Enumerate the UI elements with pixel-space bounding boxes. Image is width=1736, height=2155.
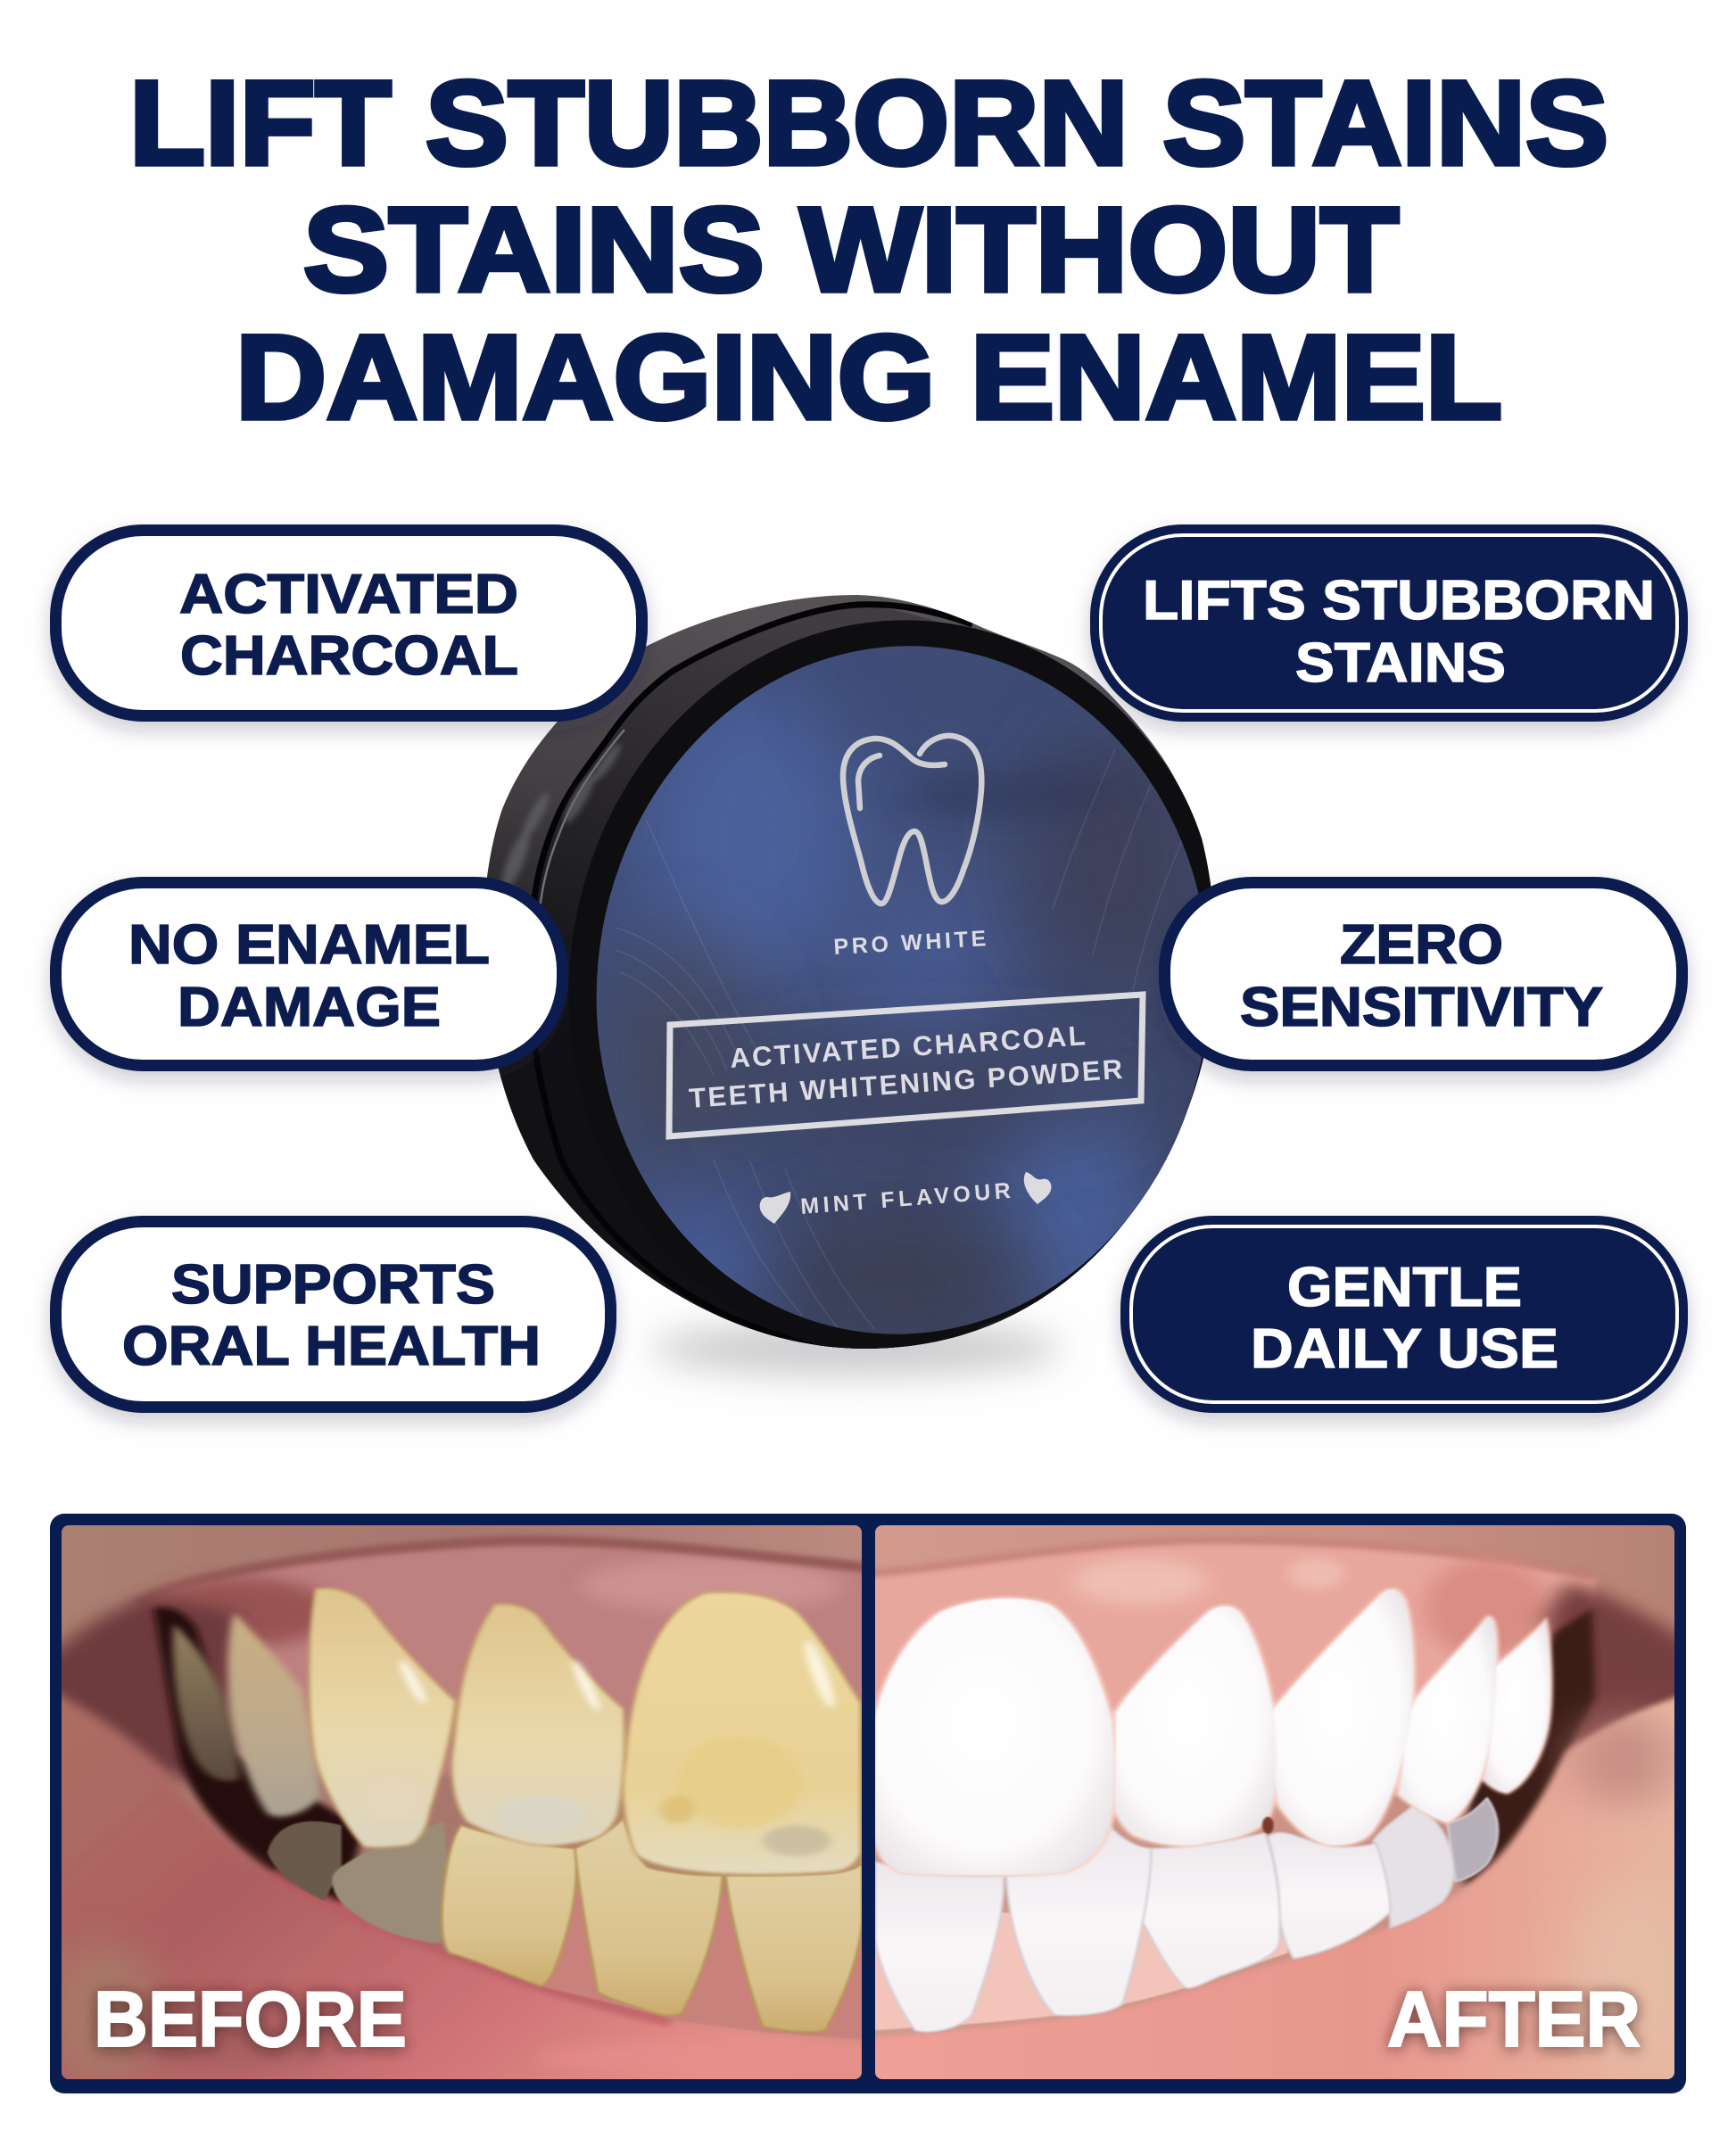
pill: no enamel damage: NO ENAMEL (128, 914, 490, 976)
pill: zero sensitivity: SENSITIVITY (1240, 977, 1603, 1038)
pill: activated charcoal (55, 530, 642, 715)
pill: gentle daily use: GENTLE (1287, 1257, 1522, 1318)
pill: lifts stubborn stains (1090, 524, 1688, 722)
interdental gap (1262, 1817, 1274, 1834)
pill: no enamel damage (55, 883, 562, 1065)
label: after: AFTER (1387, 1975, 1641, 2063)
lower teeth (268, 1818, 863, 2032)
product name box: ACTIVATED CHARCOAL (729, 1020, 1087, 1074)
label: before: BEFORE (94, 1975, 407, 2063)
pill: activated charcoal: ACTIVATED (179, 564, 518, 625)
upper gum (875, 1542, 1599, 1713)
panel: after (867, 1519, 1698, 2100)
lower gum (542, 1886, 862, 2039)
pill: lifts stubborn stains: STAINS (1295, 632, 1506, 694)
title: LIFT STUBBORN STAINS (129, 57, 1608, 190)
title (129, 57, 1608, 444)
far upper teeth (173, 1613, 318, 1817)
pill: zero sensitivity: ZERO (1340, 914, 1503, 976)
lower gum (873, 1906, 1288, 2030)
inner lid band (530, 605, 1249, 1349)
flavour line with leaf icons: MINT FLAVOUR (799, 1178, 1012, 1219)
product name box: TEETH WHITENING POWDER (688, 1053, 1123, 1114)
product: charcoal powder tin (483, 592, 1261, 1383)
flavour line with leaf icons (760, 1172, 1052, 1224)
front upper teeth (310, 1589, 861, 1874)
upper gum (236, 1545, 862, 1775)
tin body (487, 595, 1211, 1349)
pill: lifts stubborn stains: LIFTS STUBBORN (1143, 570, 1655, 632)
gum glow (875, 1589, 1550, 1875)
pill: gentle daily use (1120, 1216, 1688, 1413)
before and after photo panel (34, 1514, 1698, 2100)
mouth corner shadow (1544, 1581, 1698, 1759)
upper teeth (875, 1589, 1550, 1875)
lower lip (867, 1689, 1698, 2100)
mouth corner shadow (34, 1597, 239, 1783)
brand name: PRO WHITE (833, 926, 987, 960)
panel: before (34, 1519, 871, 2100)
pill: supports oral health (55, 1222, 610, 1408)
lower teeth (875, 1798, 1498, 2032)
pill: zero sensitivity (1165, 883, 1682, 1065)
lower lip (62, 1689, 862, 2079)
pill: gentle daily use: DAILY USE (1251, 1318, 1558, 1380)
pill: no enamel damage: DAMAGE (178, 977, 441, 1038)
tooth details (359, 1639, 839, 1856)
pill: supports oral health: ORAL HEALTH (122, 1316, 541, 1377)
title: DAMAGING ENAMEL (236, 311, 1502, 444)
product name box (669, 995, 1143, 1136)
pill: activated charcoal: CHARCOAL (180, 625, 518, 687)
title: STAINS WITHOUT (303, 184, 1399, 317)
tin label (596, 646, 1203, 1334)
pill: supports oral health: SUPPORTS (171, 1254, 495, 1316)
icon: tooth logo (843, 736, 981, 904)
